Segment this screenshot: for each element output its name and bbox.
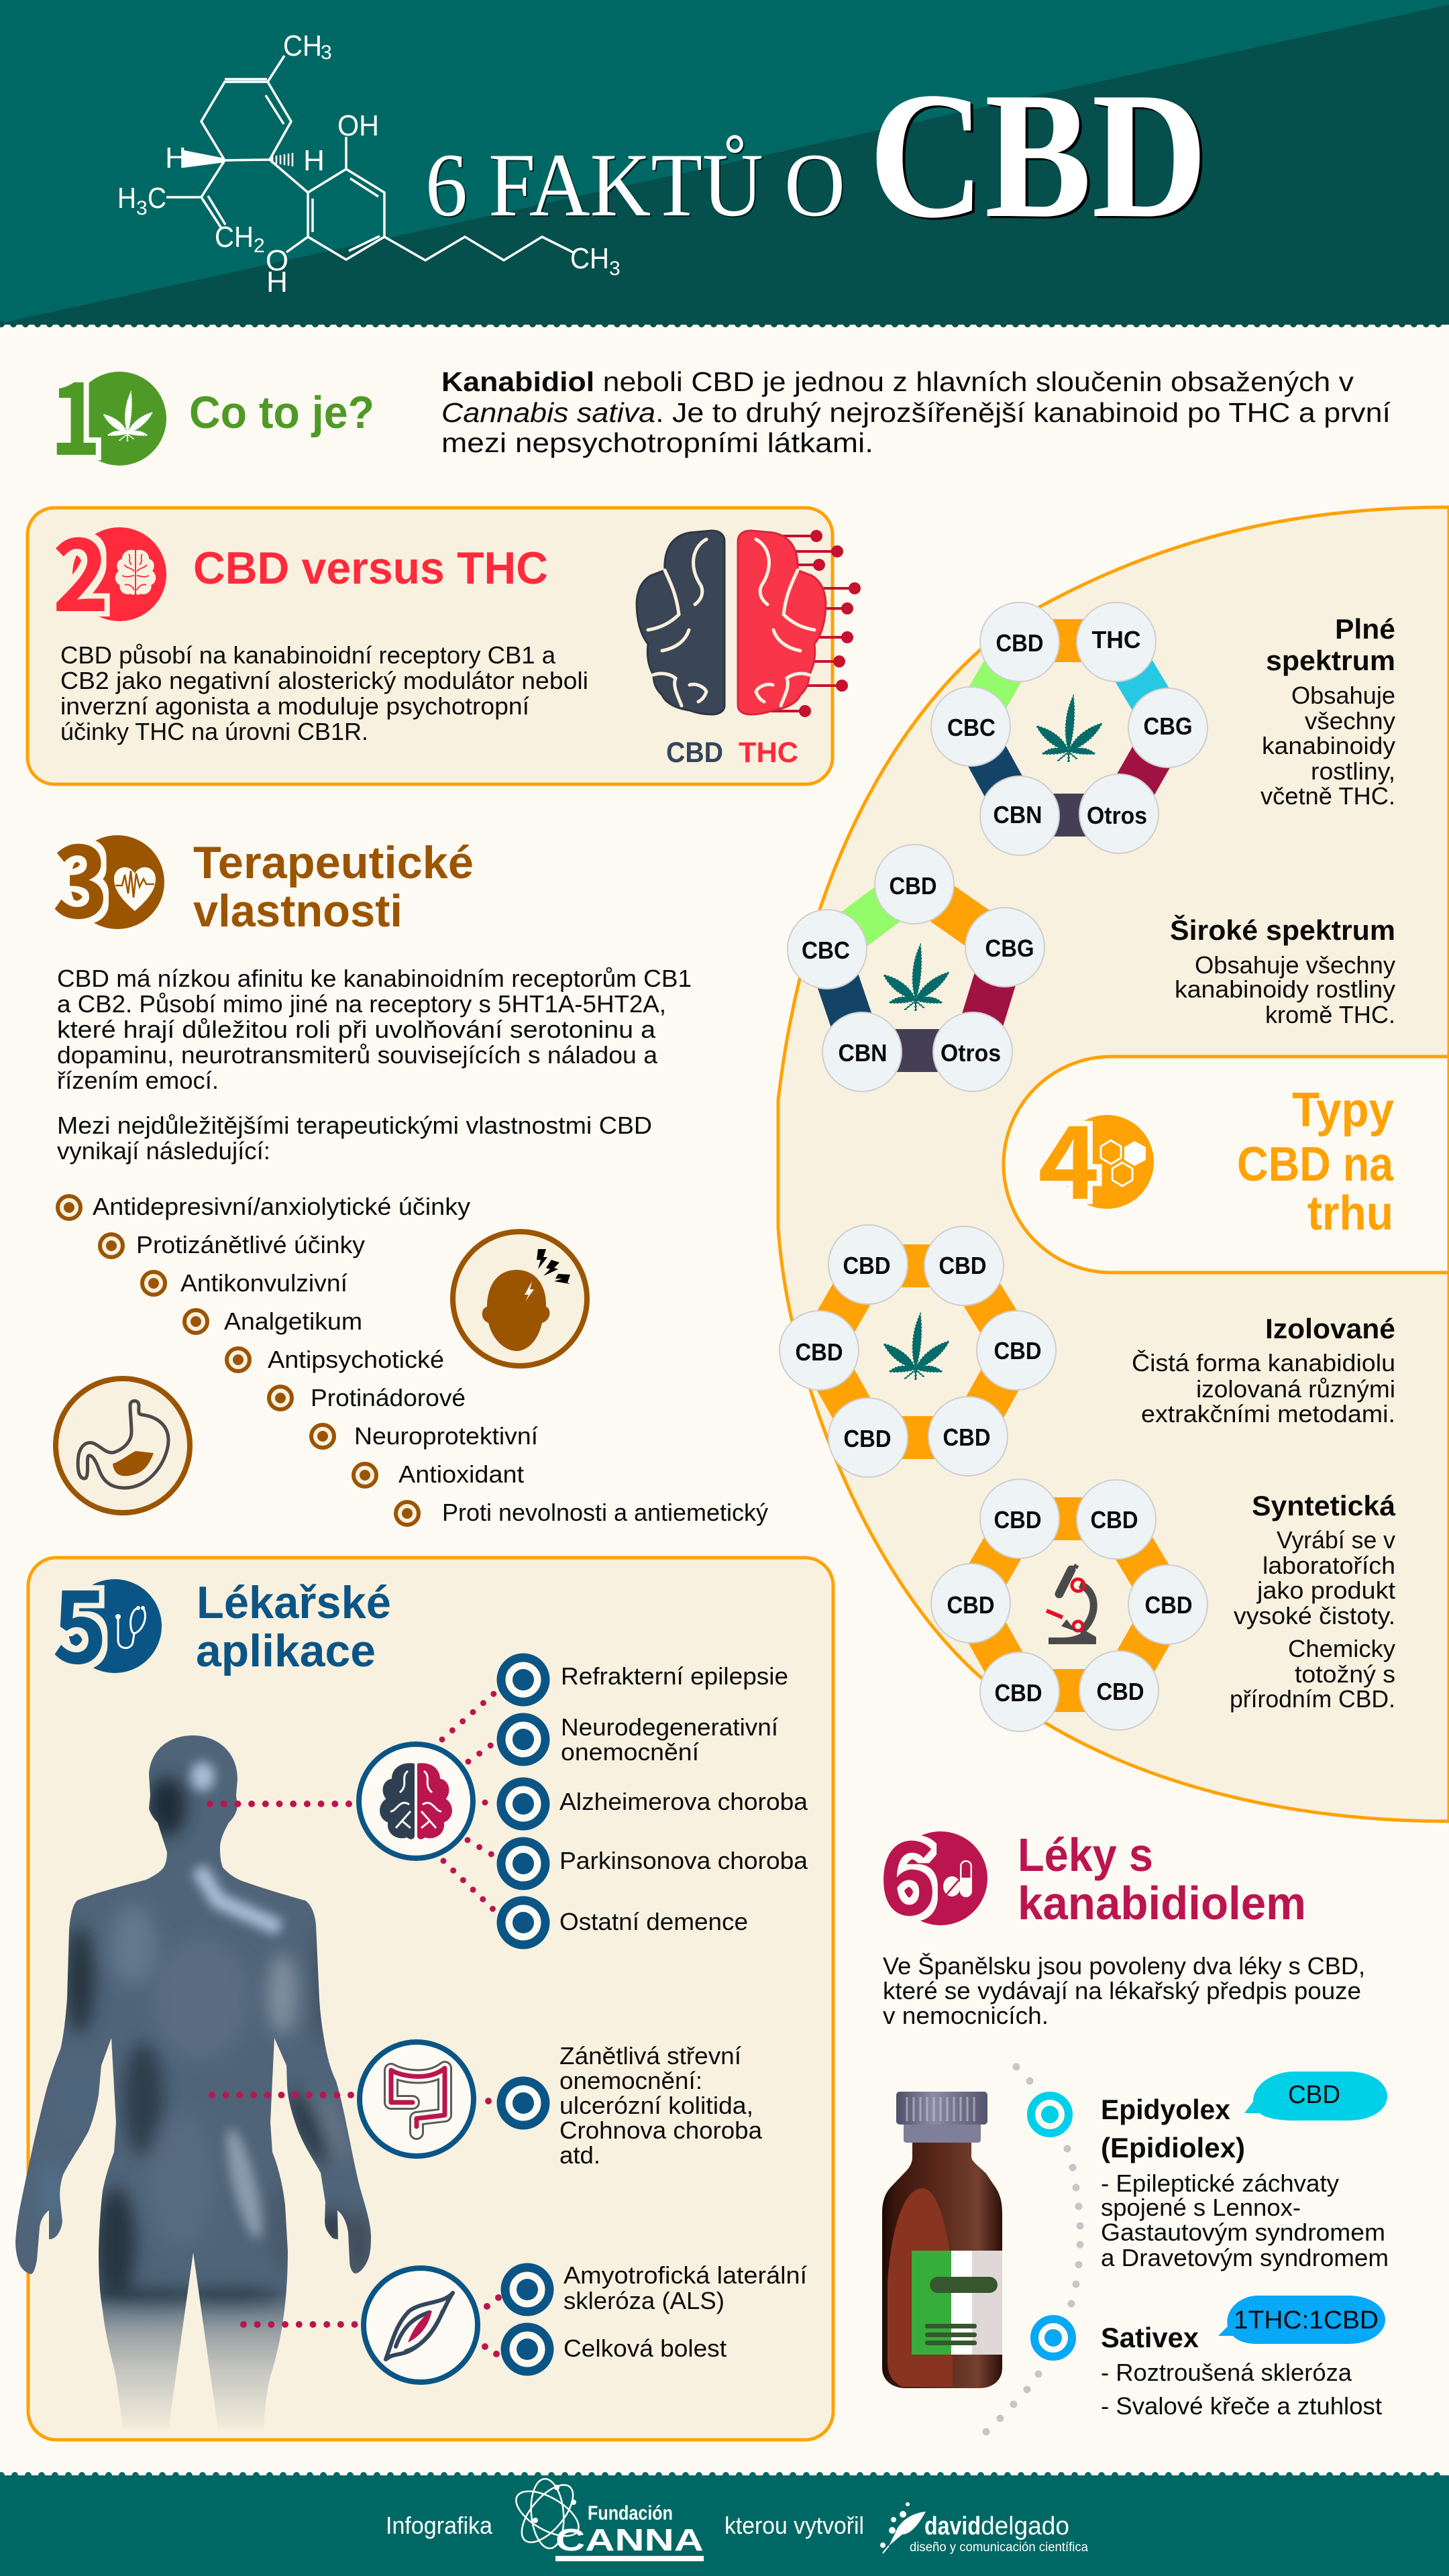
text: Epidyolex: (Epidiolex): [1101, 2132, 1245, 2163]
heading pill: [1004, 1057, 1449, 1273]
text: plné spektrum: [1260, 613, 1395, 810]
icon: stomach: [56, 1379, 190, 1513]
badge 5 with stethoscope: [52, 1547, 162, 1693]
ring: synthetic: CBD: [947, 1591, 994, 1619]
ring: broad spectrum: CBD: [890, 872, 936, 900]
dotted connector: head to brain: [210, 1801, 353, 1807]
icon: split brain: [637, 530, 861, 717]
bubble: 1THC:1CBD: 1THC:1CBD: [1234, 2306, 1379, 2334]
heading: Lékařské: [197, 1577, 391, 1628]
target: Sativex: [1034, 2319, 1072, 2357]
title: 6 FAKTŮ O: [425, 134, 845, 235]
heading text: CBD na: [1237, 1138, 1394, 1191]
heading text: Typy: [1292, 1083, 1394, 1137]
chemical structure of CBD: 3: [321, 42, 332, 64]
badge 6 with pills: 6: [879, 1799, 936, 1944]
text: izolované: extrakčními metodami.: [1141, 1400, 1395, 1428]
icon: microscope: [1046, 1565, 1096, 1644]
badge 2 with brain: [52, 495, 166, 641]
chemical structure of CBD: CH: [283, 30, 322, 62]
intro text: Kanabidiol neboli CBD je jednou z hlavních sloučenin obsažených v: [441, 366, 1354, 397]
icon: brain circle: [359, 1744, 473, 1858]
heading: aplikace: [196, 1625, 376, 1676]
text: Epidyolex: [1101, 2094, 1389, 2271]
heading: Co to je?: [189, 387, 374, 438]
heading: Léky s: [1018, 1829, 1153, 1881]
icon: head with headache: [453, 1232, 587, 1366]
ring: isolated: [780, 1225, 1056, 1477]
ring: synthetic: CBD: [994, 1679, 1042, 1707]
heading: [193, 837, 474, 936]
ring: full spectrum: [931, 602, 1208, 855]
staggered list of properties: Analgetikum: [224, 1307, 362, 1335]
ring: isolated: CBD: [844, 1425, 891, 1452]
title: [425, 55, 1208, 256]
text: Epidyolex: - Epileptické záchvaty: [1101, 2169, 1339, 2197]
text: brain conditions: Neurodegenerativní: [561, 1713, 778, 1741]
text: Sativex: - Svalové křeče a ztuhlost: [1101, 2392, 1382, 2420]
intro text: [441, 366, 1391, 458]
chemical structure of CBD: O: [266, 244, 288, 277]
text: brain conditions: Refrakterní epilepsie: [561, 1662, 788, 1690]
text: Epidyolex: spojené s Lennox-: [1101, 2194, 1301, 2221]
body text: [60, 641, 588, 745]
body text: [57, 965, 692, 1165]
chemical structure of CBD: H: [303, 144, 325, 177]
ring: isolated: CBD: [994, 1337, 1041, 1364]
text: izolované: Izolované: [1265, 1313, 1395, 1344]
text: syntetická: Chemicky: [1288, 1635, 1395, 1662]
text: syntetická: vysoké čistoty.: [1234, 1602, 1395, 1629]
text: syntetická: Vyrábí se v: [1277, 1526, 1395, 1554]
ring: broad spectrum: CBN: [839, 1039, 887, 1067]
staggered list of properties: Neuroprotektivní: [354, 1422, 538, 1450]
text: Sativex: - Roztroušená skleróza: [1101, 2359, 1352, 2386]
chemical structure of CBD: CH: [215, 221, 254, 254]
text: široké spektrum: [1170, 914, 1395, 1028]
dotted connector: thigh to muscle: [244, 2321, 357, 2328]
staggered list of properties: Antipsychotické: [268, 1346, 444, 1373]
chemical structure of CBD: 3: [136, 197, 148, 219]
text: izolované: [1132, 1313, 1395, 1428]
intro text: Ve Španělsku jsou povoleny dva léky s CBD,: [883, 1952, 1365, 1980]
targets: brain conditions: [501, 1658, 545, 1945]
credit text right: kterou vytvořil: [724, 2512, 864, 2539]
staggered list of properties: [58, 1193, 768, 1526]
bubble: CBD: [1244, 2072, 1387, 2121]
text: brain conditions: Ostatní demence: [559, 1908, 748, 1935]
text: široké spektrum: Široké spektrum: [1170, 914, 1395, 946]
text: Epidyolex: Epidyolex: [1101, 2094, 1231, 2125]
chemical structure of CBD: 2: [254, 235, 265, 257]
chemical structure of CBD: [117, 30, 621, 299]
text: syntetická: laboratořích: [1263, 1552, 1395, 1579]
body text: CBD má nízkou afinitu ke kanabinoidním receptorům CB1: [57, 965, 692, 992]
badge 2 with brain: 2: [52, 495, 109, 641]
heading: Terapeutické: [193, 837, 474, 888]
badge 3 with heart: 3: [52, 802, 109, 947]
header banner: [0, 0, 1449, 325]
badge 1 with leaf: [50, 339, 166, 484]
bottle illustration: [882, 2092, 1002, 2388]
text: syntetická: Syntetická: [1252, 1490, 1396, 1521]
staggered list of properties: Antikonvulzivní: [180, 1269, 347, 1297]
badge 4: 4: [1038, 1083, 1099, 1228]
body text: řízením emocí.: [57, 1067, 219, 1094]
body text: vynikají následující:: [57, 1137, 270, 1165]
staggered list of properties: Proti nevolnosti a antiemetický: [442, 1499, 768, 1526]
brain legend: [666, 737, 798, 769]
footer: [0, 2475, 1449, 2576]
human silhouette: [15, 1735, 371, 2424]
text: gut conditions: [559, 2042, 763, 2169]
text: brain conditions: Alzheimerova choroba: [559, 1788, 808, 1815]
bubble: CBD: CBD: [1288, 2081, 1340, 2109]
text: gut conditions: Crohnova choroba: [559, 2116, 763, 2144]
ring: synthetic: CBD: [1091, 1506, 1138, 1534]
heading: CBD versus THC: [193, 543, 548, 594]
text: brain conditions: Parkinsonova choroba: [559, 1847, 808, 1874]
intro text: [883, 1952, 1365, 2029]
body text: dopaminu, neurotransmiterů souvisejících s náladou a: [57, 1041, 658, 1069]
dot and target: gut condition: [485, 2081, 545, 2125]
chemical structure of CBD: OH: [337, 109, 379, 142]
text: muscle conditions: Celková bolest: [564, 2334, 727, 2362]
heading: kanabidiolem: [1018, 1877, 1306, 1929]
bubble: 1THC:1CBD: [1218, 2296, 1385, 2344]
text: izolované: Čistá forma kanabidiolu: [1132, 1349, 1395, 1377]
ring: full spectrum: CBC: [947, 714, 996, 741]
intro text: mezi nepsychotropními látkami.: [441, 427, 873, 458]
text: plné spektrum: Plné: [1335, 613, 1395, 645]
intro text: Cannabis sativa . Je to druhý nejrozšířenější kanabinoid po THC a první: [441, 397, 1391, 428]
target: Epidyolex: [1031, 2096, 1069, 2133]
intro text: v nemocnicích.: [883, 2002, 1049, 2029]
text: brain conditions: [559, 1662, 808, 1935]
text: gut conditions: onemocnění:: [559, 2067, 702, 2094]
logo: david delgado: david: [924, 2512, 981, 2540]
ring: full spectrum: Otros: [1087, 802, 1147, 829]
ring: full spectrum: CBD: [996, 629, 1044, 657]
ring: isolated: CBD: [843, 1252, 891, 1279]
body text: které hrají důležitou roli při uvolňování serotoninu a: [57, 1016, 656, 1043]
ring: synthetic: CBD: [1144, 1591, 1193, 1619]
text: gut conditions: atd.: [559, 2141, 600, 2169]
body text: Mezi nejdůležitějšími terapeutickými vlastnostmi CBD: [57, 1112, 652, 1139]
text: široké spektrum: kanabinoidy rostliny: [1175, 975, 1395, 1003]
text: plné spektrum: všechny: [1305, 707, 1395, 735]
logo: Fundación CANNA: CANNA: [555, 2522, 704, 2557]
chemical structure of CBD: 3: [609, 258, 621, 280]
logo: Fundación CANNA: [509, 2477, 704, 2561]
text: široké spektrum: kromě THC.: [1265, 1001, 1395, 1028]
staggered list of properties: Protizánětlivé účinky: [136, 1231, 365, 1258]
badge 5 with stethoscope: 5: [52, 1547, 107, 1693]
text: muscle conditions: [564, 2261, 807, 2362]
ring: isolated: CBD: [796, 1338, 843, 1366]
logo: Fundación CANNA: Fundación: [588, 2502, 673, 2524]
text: syntetická: jako produkt: [1256, 1576, 1395, 1604]
text: plné spektrum: rostliny,: [1311, 757, 1395, 785]
logo: david delgado: diseño y comunicación científica: [910, 2540, 1088, 2555]
chemical structure of CBD: CH: [570, 242, 609, 275]
body text: inverzní agonista a moduluje psychotropní: [60, 692, 529, 720]
badge 6 with pills: [879, 1799, 987, 1944]
ring: broad spectrum: [788, 845, 1044, 1091]
ring: synthetic: CBD: [1096, 1678, 1144, 1705]
section 1: co to je: [50, 339, 1391, 484]
ring: synthetic: [931, 1479, 1208, 1731]
text: Sativex: Sativex: [1101, 2322, 1199, 2353]
dots and targets: muscle conditions: [482, 2267, 549, 2371]
chemical structure of CBD: H: [266, 266, 288, 299]
heading: [196, 1577, 391, 1676]
text: muscle conditions: skleróza (ALS): [564, 2287, 724, 2314]
panel: lékařské aplikace: [0, 1547, 833, 2442]
panel: CBD versus THC: [28, 495, 861, 784]
dotted connector: abdomen to gut: [212, 2092, 352, 2098]
heading text: [1237, 1083, 1394, 1240]
ring: isolated: CBD: [943, 1424, 990, 1451]
title: CBD: [869, 55, 1208, 256]
text: Epidyolex: a Dravetovým syndromem: [1101, 2244, 1389, 2271]
brain legend: CBD: [666, 737, 723, 769]
credit text left: Infografika: [386, 2512, 493, 2539]
badge 4: [1038, 1083, 1154, 1228]
ring: full spectrum: THC: [1092, 626, 1140, 653]
body text: účinky THC na úrovni CB1R.: [60, 718, 368, 745]
text: široké spektrum: Obsahuje všechny: [1195, 951, 1395, 979]
panel: typy CBD na trhu: [778, 507, 1449, 1821]
staggered list of properties: Antioxidant: [398, 1460, 524, 1488]
text: brain conditions: onemocnění: [561, 1738, 699, 1766]
heading: [1018, 1829, 1306, 1929]
text: plné spektrum: včetně THC.: [1260, 782, 1395, 810]
icon: intestine circle: [360, 2042, 474, 2156]
text: gut conditions: ulcerózní kolitida,: [559, 2092, 753, 2119]
heading text: trhu: [1307, 1187, 1393, 1240]
text: plné spektrum: kanabinoidy: [1262, 732, 1395, 759]
ring: full spectrum: CBG: [1143, 712, 1193, 740]
text: syntetická: totožný s: [1295, 1660, 1395, 1688]
text: muscle conditions: Amyotrofická laterální: [564, 2261, 807, 2289]
text: Epidyolex: Gastautovým syndromem: [1101, 2218, 1385, 2246]
ring: synthetic: CBD: [994, 1506, 1041, 1534]
section 3: terapeutické vlastnosti: [52, 802, 768, 1526]
logo: david delgado: delgado: [981, 2512, 1069, 2540]
badge 1 with leaf: 1: [50, 339, 101, 484]
text: Sativex: [1101, 2322, 1382, 2420]
badge 3 with heart: [52, 802, 164, 947]
text: plné spektrum: Obsahuje: [1291, 682, 1395, 709]
chemical structure of CBD: C: [148, 182, 166, 215]
body text: a CB2. Působí mimo jiné na receptory s 5HT1A-5HT2A,: [57, 990, 666, 1018]
chemical structure of CBD: H: [117, 182, 136, 215]
text: izolované: izolovaná různými: [1196, 1375, 1395, 1403]
heading: vlastnosti: [193, 885, 402, 936]
chemical structure of CBD: H: [165, 142, 186, 174]
body text: CBD působí na kanabinoidní receptory CB1 a: [60, 641, 556, 669]
text: syntetická: přírodním CBD.: [1230, 1685, 1395, 1713]
staggered list of properties: Antidepresivní/anxiolytické účinky: [93, 1193, 470, 1220]
ring: broad spectrum: Otros: [941, 1039, 1001, 1067]
text: syntetická: [1230, 1490, 1396, 1713]
staggered list of properties: Protinádorové: [311, 1384, 466, 1411]
body text: CB2 jako negativní alosterický modulátor neboli: [60, 667, 588, 694]
dotted arc: [982, 2063, 1084, 2435]
logo: david delgado: [880, 2502, 1088, 2555]
text: plné spektrum: spektrum: [1266, 645, 1395, 676]
ring: full spectrum: CBN: [993, 801, 1042, 828]
brain legend: THC: [739, 737, 798, 769]
icon: muscle circle: [364, 2268, 478, 2382]
intro text: které se vydávají na lékařský předpis pouze: [883, 1977, 1361, 2004]
section 6: léky s kanabidiolem: [879, 1799, 1389, 2435]
ring: broad spectrum: CBG: [985, 934, 1034, 962]
text: gut conditions: Zánětlivá střevní: [559, 2042, 741, 2070]
dotted connectors: brain to conditions: [442, 1693, 494, 1909]
ring: isolated: CBD: [939, 1252, 986, 1279]
ring: broad spectrum: CBC: [802, 936, 850, 964]
